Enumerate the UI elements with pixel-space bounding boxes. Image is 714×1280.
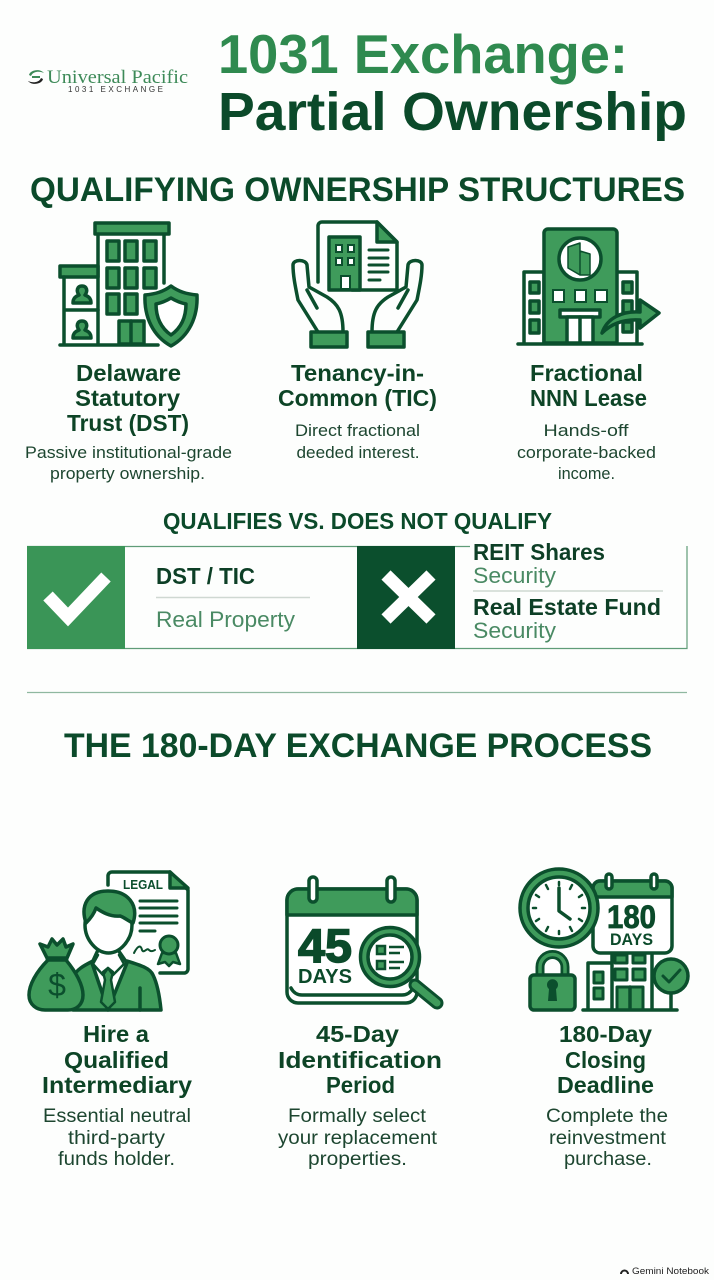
label (67, 360, 189, 436)
heading: qualifying ownership structures: QUALIFYING OWNERSHIP STRUCTURES (30, 171, 685, 209)
label: Trust (DST) (67, 410, 189, 436)
description: Essential neutral (43, 1106, 191, 1127)
description (295, 421, 420, 462)
icon: clock, calendar, lock and building: 180 (607, 899, 656, 935)
title: 1031 Exchange: (218, 23, 628, 85)
non-qualifying entries: Security (473, 563, 556, 588)
footer: Gemini Notebook: Gemini Notebook (632, 1266, 710, 1276)
label: Deadline (557, 1072, 654, 1098)
label: Delaware (76, 360, 181, 386)
description: Complete the (546, 1106, 668, 1127)
label (530, 360, 647, 411)
label (278, 360, 437, 411)
non-qualifying entries: Security (473, 618, 556, 643)
label: Tenancy-in- (291, 360, 424, 386)
icon: intermediary with legal document and money bag: $ (48, 967, 66, 1003)
description: income. (558, 464, 615, 483)
label: Identification (278, 1047, 442, 1073)
label (42, 1021, 192, 1098)
label: 180-Day (559, 1021, 652, 1047)
description: deeded interest. (296, 443, 420, 462)
description: corporate-backed (517, 443, 656, 462)
heading: qualifies vs does not qualify: QUALIFIES VS. DOES NOT QUALIFY (163, 508, 552, 534)
label: Common (TIC) (278, 385, 437, 411)
non-qualifying entries: REIT Shares (473, 539, 605, 565)
qualifying entry: Real Property (156, 607, 295, 632)
qualifying entry: DST / TIC (156, 563, 255, 589)
label: Closing (565, 1047, 646, 1073)
panel: 45-Day Identification Period (278, 877, 442, 1170)
non-qualifying entries (473, 539, 663, 643)
logo: Universal Pacific 1031 Exchange: Universal Pacific (47, 67, 188, 88)
panel: comparison (27, 539, 687, 649)
icon: calendar with magnifier (287, 877, 437, 1003)
description: Hands-off (544, 421, 629, 440)
description: purchase. (564, 1149, 652, 1170)
description: properties. (308, 1149, 407, 1170)
label: 45-Day (316, 1021, 399, 1047)
description: Passive institutional-grade (25, 443, 232, 462)
label: Period (326, 1072, 395, 1098)
title: Partial Ownership (218, 82, 687, 142)
panel: Fractional NNN Lease (517, 229, 659, 483)
icon: hands holding deed (293, 222, 422, 347)
description (43, 1106, 191, 1170)
panel: Hire a Qualified Intermediary (29, 872, 192, 1170)
label: NNN Lease (530, 385, 647, 411)
icon: intermediary with legal document and money bag (29, 872, 188, 1010)
label: Hire a (83, 1021, 149, 1047)
panel: Tenancy-in-Common (278, 222, 437, 462)
description: Direct fractional (295, 421, 420, 440)
icon: commercial tower with arrow (518, 229, 659, 344)
icon: intermediary with legal document and money bag: LEGAL (123, 877, 163, 892)
description: property ownership. (50, 464, 205, 483)
label (557, 1021, 654, 1098)
label (278, 1021, 442, 1098)
label: Statutory (75, 385, 180, 411)
label: Intermediary (42, 1072, 192, 1098)
description (546, 1106, 668, 1170)
icon: calendar with magnifier: 45 (298, 919, 352, 972)
title (218, 23, 687, 142)
icon: check mark block (27, 546, 125, 649)
description (278, 1106, 438, 1170)
description (25, 443, 232, 483)
description: third-party (68, 1128, 166, 1149)
logo: Universal Pacific 1031 Exchange: 1031 EXCHANGE (68, 85, 163, 94)
description: funds holder. (58, 1149, 175, 1170)
label: Qualified (64, 1047, 169, 1073)
description: Formally select (288, 1106, 427, 1127)
icon: clock, calendar, lock and building: DAYS (610, 930, 653, 949)
icon: office building with shield (60, 223, 197, 346)
description (517, 421, 656, 483)
logo: Universal Pacific 1031 Exchange (28, 67, 188, 94)
icon: clock, calendar, lock and building (520, 869, 688, 1010)
description: your replacement (278, 1128, 438, 1149)
panel: Delaware Statutory Trust (25, 223, 232, 483)
description: reinvestment (549, 1128, 667, 1149)
qualifying entry (156, 563, 310, 632)
icon: calendar with magnifier: DAYS (298, 966, 352, 988)
non-qualifying entries: Real Estate Fund (473, 594, 661, 620)
label: Fractional (530, 360, 643, 386)
heading: the 180-day exchange process: THE 180-DAY EXCHANGE PROCESS (64, 727, 652, 765)
icon: cross block (357, 546, 455, 649)
panel: 180-Day Closing Deadline (520, 869, 688, 1170)
